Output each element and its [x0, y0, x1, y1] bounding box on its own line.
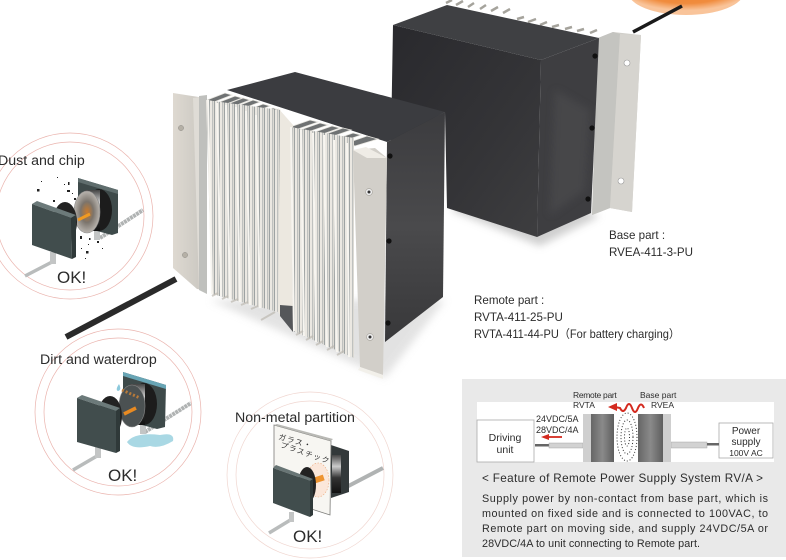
power supply box: Power [732, 426, 761, 437]
top face [393, 5, 599, 60]
fins behind base part [446, 0, 597, 33]
fin group highlights [208, 100, 349, 357]
label: remote part: RVTA-411-44-PU（For battery charging） [474, 327, 680, 341]
right bracket [353, 148, 387, 375]
power supply box: 100V AC [729, 448, 763, 458]
orange glow top right [628, 0, 744, 15]
screws [592, 53, 598, 59]
product photo: remote part RVTA [173, 72, 445, 379]
left bracket [173, 93, 205, 290]
central plate [278, 108, 293, 332]
power supply box: supply [732, 437, 760, 448]
icon: coupler in dust [25, 177, 143, 276]
caption text [482, 493, 769, 550]
circle rings [227, 392, 393, 558]
icon: coupler through partition: プラスチック [279, 440, 332, 466]
diagram labels: RVTA [573, 400, 595, 410]
label: OK: OK! [57, 268, 86, 287]
driving unit box: unit [497, 444, 514, 456]
screws [387, 153, 393, 159]
power supply box [719, 423, 773, 458]
right fin block [290, 127, 354, 358]
label: base part: Base part : [609, 229, 665, 242]
right black face [385, 112, 445, 342]
caption text: 28VDC/4A to unit connecting to Remote part. [482, 538, 700, 550]
product photo: base part RVEA [391, 0, 641, 246]
label: remote part [474, 294, 680, 341]
driving unit box: Driving [489, 432, 521, 444]
panel: remote power supply system [462, 379, 786, 557]
caption text: Remote part on moving side, and supply 24VDC/5A or [482, 523, 768, 535]
fin tooth tops [207, 93, 378, 146]
schematic diagram [477, 390, 774, 462]
partition panel [274, 425, 331, 515]
diagram labels: Remote part [573, 390, 617, 400]
panel: dust and chip [0, 133, 153, 299]
circle rings [35, 329, 201, 495]
icon: coupler through partition [269, 424, 383, 533]
diagram labels: RVEA [651, 400, 674, 410]
driving unit box [477, 420, 534, 462]
heading: dust and chip: Dust and chip [0, 153, 85, 169]
magnetic field dots [617, 413, 637, 461]
right face [537, 38, 599, 237]
cable of base part [633, 6, 682, 32]
panel: non-metal partition [227, 392, 393, 558]
caption text: mounted on fixed side and is connected to 100VAC, to [482, 508, 768, 520]
panel: dirt and waterdrop [35, 329, 201, 495]
fin foot shadows [212, 293, 344, 355]
diagram labels [536, 390, 677, 435]
heading: non-metal partition: Non-metal partition [235, 410, 355, 426]
top black face [227, 72, 445, 142]
heading: dirt and waterdrop: Dirt and waterdrop [40, 352, 157, 368]
remote cylinder [583, 414, 591, 462]
label: remote part: Remote part : [474, 294, 544, 307]
label: base part: RVEA-411-3-PU [609, 246, 693, 259]
japanese partition label: ガラス・ [277, 431, 314, 450]
label: OK: OK! [293, 527, 322, 546]
diagram labels: Base part [640, 390, 677, 400]
red wave arrow [608, 403, 644, 412]
cable of remote part [66, 279, 176, 337]
front face [391, 25, 541, 237]
base cylinder [638, 414, 663, 462]
rods [535, 444, 549, 446]
bracket [592, 32, 641, 215]
icon: coupler with water [73, 372, 191, 470]
label: remote part: RVTA-411-25-PU [474, 311, 563, 324]
red output arrow [541, 434, 562, 440]
caption text: Supply power by non-contact from base part, which is [482, 493, 769, 505]
left fin block [206, 100, 280, 312]
diagram labels: 24VDC/5A [536, 414, 579, 424]
label: base part [609, 229, 693, 259]
caption heading: < Feature of Remote Power Supply System RV/A > [482, 472, 763, 485]
circle rings [0, 133, 153, 299]
label: OK: OK! [108, 466, 137, 485]
diagram labels: 28VDC/4A [536, 425, 579, 435]
